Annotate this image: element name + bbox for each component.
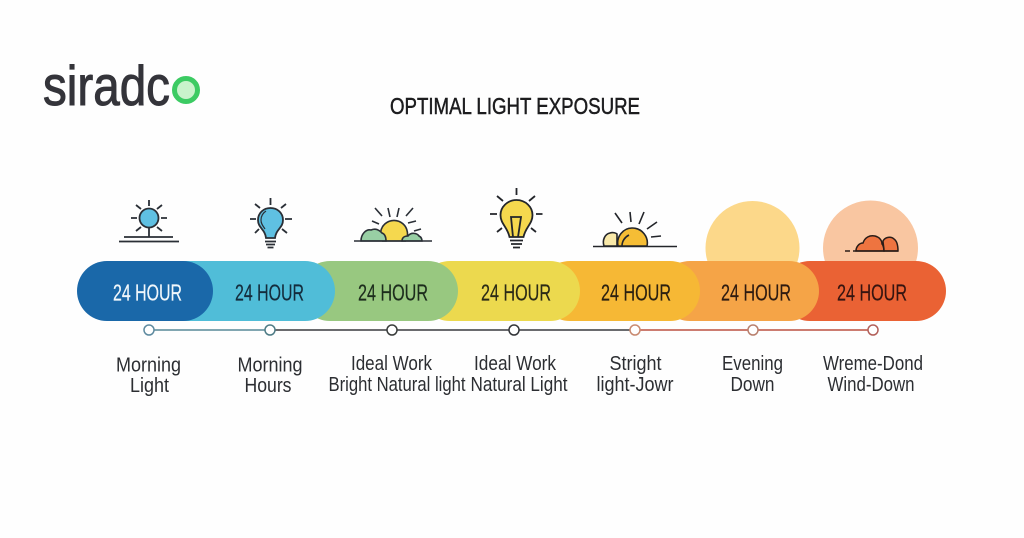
label: Ideal Work Bright Natural light: Bright Natural light	[328, 374, 466, 396]
icon: orange cloud	[845, 236, 898, 251]
icon: blue light bulb	[250, 198, 292, 248]
pale sun circles behind the bar	[706, 200, 918, 296]
segment: teal	[150, 261, 335, 321]
logo: siradco: siradc	[43, 54, 170, 117]
label: Morning Light	[116, 354, 181, 397]
segment: red	[780, 261, 946, 321]
bar label 1: 24 HOUR	[113, 280, 182, 306]
label: Wreme-Dond Wind-Down: Wind-Down	[828, 374, 914, 396]
timeline with markers	[144, 325, 878, 335]
bar label 3: 24 HOUR	[358, 280, 428, 306]
icon: yellow light bulb	[490, 188, 542, 248]
label: Evening Down: Down	[730, 374, 774, 396]
label: Morning Hours: Morning	[238, 354, 302, 376]
bar label 7: 24 HOUR	[837, 280, 907, 306]
icon: amber setting sun	[593, 212, 677, 246]
bar label 4: 24 HOUR	[481, 280, 551, 306]
label: Ideal Work Natural Light	[470, 353, 568, 396]
segment: blue	[77, 261, 213, 321]
label: Stright light-Jowr: Stright	[610, 353, 662, 375]
label: Ideal Work Bright Natural light: Ideal Work	[351, 353, 433, 375]
label: Evening Down: Evening	[722, 353, 783, 375]
title: OPTIMAL LIGHT EXPOSURE	[390, 93, 640, 119]
segment: orange	[660, 261, 819, 321]
label: Wreme-Dond Wind-Down	[823, 353, 923, 396]
segment: yellow	[420, 261, 580, 321]
segment: green	[300, 261, 458, 321]
label: Stright light-Jowr: light-Jowr	[596, 374, 674, 396]
label: Ideal Work Natural Light: Natural Light	[470, 374, 568, 396]
label: Ideal Work Bright Natural light	[328, 353, 466, 396]
label: Wreme-Dond Wind-Down: Wreme-Dond	[823, 353, 923, 375]
bar label 5: 24 HOUR	[601, 280, 671, 306]
label: Morning Hours: Hours	[244, 375, 292, 397]
label: Stright light-Jowr	[596, 353, 674, 396]
label: Morning Light: Light	[130, 375, 169, 397]
bar label 2: 24 HOUR	[235, 280, 304, 306]
segment: amber	[540, 261, 700, 321]
label: Evening Down	[722, 353, 783, 396]
label: Morning Hours	[238, 354, 302, 397]
label: Ideal Work Natural Light: Ideal Work	[474, 353, 557, 375]
timeline bar	[77, 261, 946, 321]
icon: sun rising between green hills	[354, 208, 432, 241]
icon: sunrise with horizon	[119, 200, 179, 242]
bar label 6: 24 HOUR	[721, 280, 791, 306]
label: Morning Light: Morning	[116, 354, 181, 376]
